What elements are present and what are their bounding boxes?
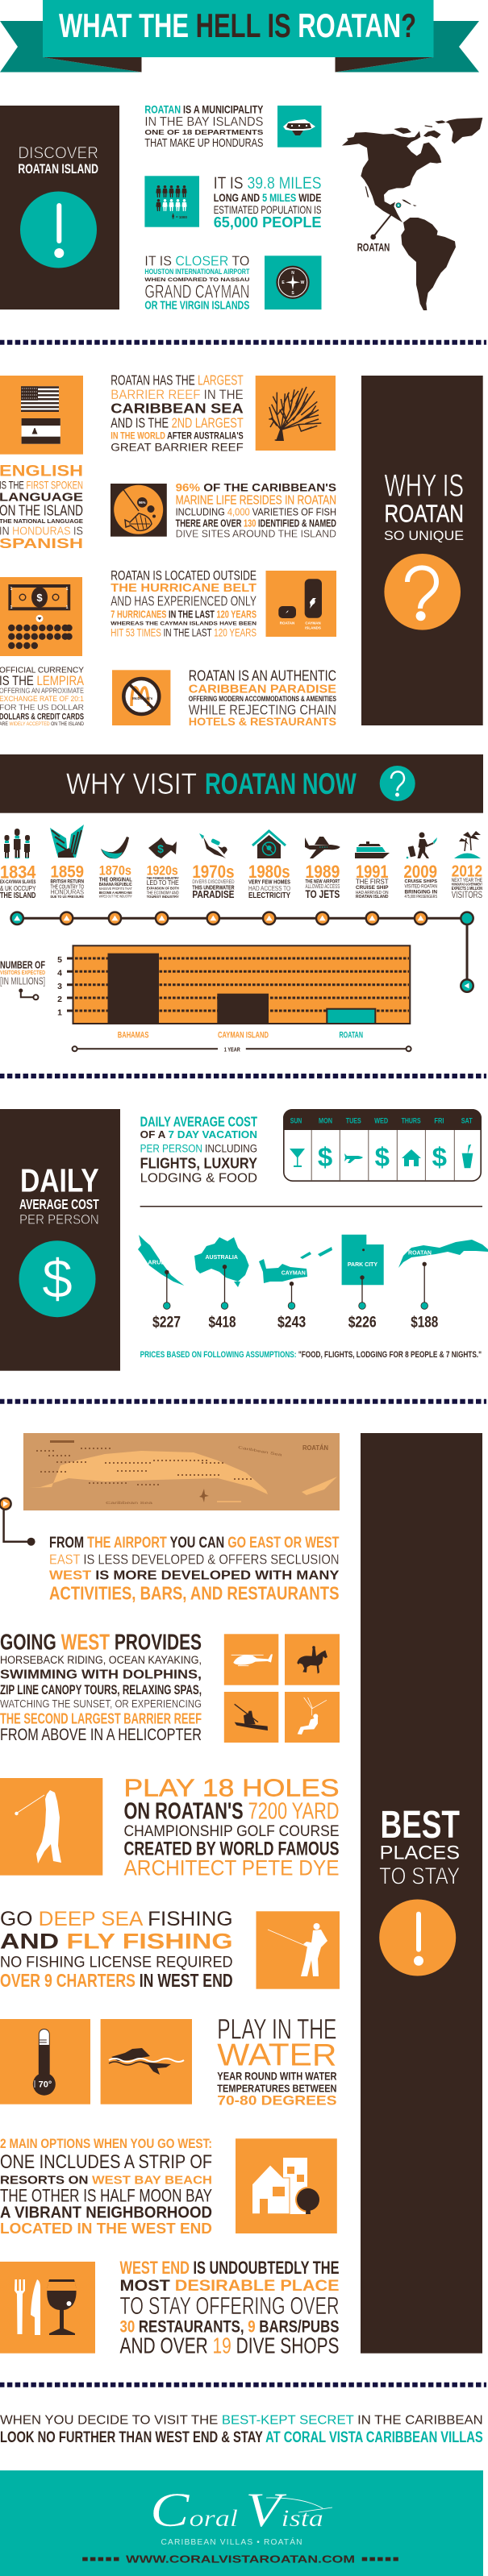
icon: compass: N [291, 271, 294, 276]
text block: english language: IS THE FIRST SPOKEN [0, 479, 83, 492]
timeline: 1920s: THE FISHING INDUSTRY [147, 876, 179, 880]
timeline: 1920s: 1920s [147, 863, 178, 879]
calendar: week of costs: WED [374, 1116, 388, 1125]
text block: marine life: INCLUDING 4,000 VARIETIES OF FISH [176, 506, 336, 517]
text block: marine life: THERE ARE OVER 130 IDENTIFIED & NAMED [176, 517, 336, 530]
timeline: 1980s: 1980s [248, 862, 290, 882]
timeline: 2009 [403, 862, 437, 900]
axis labels: 2 [57, 995, 62, 1004]
text block: fishing: GO DEEP SEA FISHING [0, 1908, 233, 1930]
text block: barrier reef: BARRIER REEF IN THE [111, 387, 244, 402]
section header: why visit roatan now [0, 754, 483, 813]
text block: going west: WATCHING THE SUNSET, OR EXPERIENCING [0, 1697, 202, 1710]
text block: west end: TO STAY OFFERING OVER [119, 2292, 339, 2320]
chart label: number of visitors: [IN MILLIONS] [0, 976, 45, 987]
panel: daily average cost: PER PERSON [19, 1211, 99, 1227]
icon: flags [0, 376, 83, 455]
icon: helicopter [224, 1634, 278, 1685]
timeline: 1920s: TOURIST INDUSTRY [147, 895, 179, 900]
text block: authentic paradise: ROATAN IS AN AUTHENTIC [189, 667, 336, 683]
timeline: 1980s: HAD ACCESS TO [248, 884, 290, 892]
chart label: number of visitors: VISITORS EXPECTED [0, 969, 45, 976]
timeline: 2012: 2012 [452, 862, 482, 880]
timeline: 1991: 1991 [356, 862, 389, 882]
icon: eagle [50, 825, 84, 858]
map: price comparison destinations: ROATAN [408, 1251, 432, 1256]
bar chart: visitors expected [57, 945, 410, 1040]
text block: play in the water: PLAY IN THE [217, 2013, 337, 2045]
timeline: 1859 [50, 862, 85, 900]
text block: english language: LANGUAGE [0, 491, 83, 505]
icon: thermometer: 70° [39, 2079, 52, 2089]
panel: discover roatan island [0, 106, 119, 310]
bar: cayman island [217, 994, 269, 1024]
text block: marine life [176, 481, 336, 539]
axis labels: CAYMAN ISLAND [218, 1030, 269, 1040]
bar icon: hurricanes comparison [266, 571, 336, 637]
text block: fishing: AND FLY FISHING [0, 1930, 233, 1954]
text block: size and population: ESTIMATED POPULATION IS [214, 203, 321, 216]
timeline: 1859: DUE TO US PRESSURE [50, 895, 85, 900]
text block: 7 day vacation: PER PERSON INCLUDING [140, 1142, 257, 1154]
text block: two main options: 2 MAIN OPTIONS WHEN YOU GO WEST: [0, 2136, 212, 2151]
icon: diver [199, 833, 227, 858]
footer: coral vista logo: C oral V ista [150, 2483, 323, 2537]
text block: hurricane belt: WHEREAS THE CAYMAN ISLANDS HAVE BEEN [111, 621, 257, 627]
icon: plane [344, 1153, 363, 1163]
timeline: 1834: 1834 [0, 862, 36, 882]
timeline: 1980s: ELECTRICITY [248, 891, 290, 900]
map: price comparison destinations: CAYMAN [282, 1270, 306, 1277]
axis labels: 5 [57, 955, 62, 965]
timeline: 1859: HONDURAS [50, 888, 84, 895]
footer: coral vista logo [0, 2470, 483, 2576]
icon: houses and tree [236, 2138, 337, 2233]
text block: golf: CREATED BY WORLD FAMOUS [124, 1839, 339, 1860]
timeline: 1980s [248, 862, 290, 900]
text block: english language: IN HONDURAS IS [0, 526, 83, 538]
chart label: number of visitors [0, 959, 45, 999]
section header: why visit roatan now: ROATAN NOW [205, 767, 357, 800]
title banner [0, 0, 479, 73]
timeline: 2009: VISITED ROATAN [405, 883, 437, 889]
map: roatan island: Caribbean Sea [106, 1501, 153, 1505]
text block: size and population: 65,000 PEOPLE [214, 214, 321, 231]
text block: going west: SWIMMING WITH DOLPHINS, [0, 1668, 202, 1682]
axis labels: 3 [57, 982, 62, 991]
text block: barrier reef: AND IS THE 2ND LARGEST [111, 415, 244, 431]
icon: traveler [407, 832, 437, 858]
island: australia [194, 1237, 249, 1287]
icon: money fish [148, 837, 177, 858]
connector arrow to airport text [0, 1498, 35, 1546]
text block: from the airport: FROM THE AIRPORT YOU CAN GO EAST OR WEST [49, 1535, 340, 1552]
icon: compass [265, 256, 321, 310]
timeline: 1980s: VERY FEW HOMES [248, 879, 290, 886]
timeline: 1870s [99, 863, 132, 898]
text block: 7 day vacation: DAILY AVERAGE COST [140, 1113, 257, 1129]
text block: going west [0, 1630, 202, 1744]
island: roatan [398, 1240, 488, 1268]
icon: currency exchange: 1 [10, 605, 13, 610]
icon: marine life [111, 484, 167, 537]
calendar: week of costs: $ [432, 1142, 447, 1172]
text block: authentic paradise: OFFERING MODERN ACCOMMODATIONS & AMENITIES [189, 695, 336, 703]
prices: $243 [277, 1314, 306, 1332]
text block: barrier reef [111, 372, 244, 453]
panel: best places to stay [361, 1433, 482, 2354]
text block: golf: ARCHITECT PETE DYE [124, 1856, 339, 1880]
text block: closer to houston: HOUSTON INTERNATIONAL AIRPORT [144, 268, 250, 276]
text block: from the airport: ACTIVITIES, BARS, AND RESTAURANTS [49, 1582, 339, 1603]
text block: going west: GOING WEST PROVIDES [0, 1630, 202, 1655]
text block: size and population: LONG AND 5 MILES WIDE [214, 192, 322, 204]
text block: authentic paradise: HOTELS & RESTAURANTS [189, 716, 336, 728]
text block: two main options [0, 2136, 212, 2237]
prices: $418 [208, 1314, 236, 1332]
icon: horse rider [285, 1634, 340, 1685]
map: price comparison destinations [138, 1235, 488, 1309]
timeline: 2012 [452, 862, 482, 900]
timeline: 2009: CRUISE SHIPS [405, 879, 437, 884]
icon: cocktail [290, 1149, 305, 1167]
text block: west end [119, 2258, 339, 2358]
icon: zipline [285, 1692, 340, 1743]
panel: daily average cost: DAILY [20, 1161, 99, 1199]
timeline: 1870s: 1870s [99, 863, 131, 879]
text block: municipality: ONE OF 18 DEPARTMENTS [144, 128, 264, 136]
text block: authentic paradise [189, 667, 336, 728]
icon: no chain restaurants [112, 670, 170, 725]
text block: english language: ENGLISH [0, 463, 83, 480]
text block: golf: CHAMPIONSHIP GOLF COURSE [124, 1823, 340, 1840]
text block: two main options: RESORTS ON WEST BAY BEACH [0, 2174, 212, 2187]
timeline: 1970s: DIVERS DISCOVERED [192, 879, 235, 885]
timeline: 2009: BRINGING IN [405, 890, 437, 895]
timeline: 1859: THE COUNTRY TO [50, 883, 84, 890]
timeline: 1989: TO JETS [305, 887, 340, 900]
calendar: week of costs [283, 1109, 482, 1181]
text block: going west: FROM ABOVE IN A HELICOPTER [0, 1725, 202, 1744]
bar: roatan [327, 1009, 375, 1024]
icon: compass: E [282, 280, 285, 285]
text block: currency: OFFERING AN APPROXIMATE [0, 687, 84, 695]
icon: honduras map [277, 106, 321, 147]
icon: house with bulb [252, 831, 286, 858]
text block: barrier reef: ROATAN HAS THE LARGEST [111, 372, 244, 388]
text block: west end: MOST DESIRABLE PLACE [119, 2277, 339, 2295]
footer: coral vista logo: WWW.CORALVISTAROATAN.COM [126, 2553, 355, 2565]
text block: play in the water [217, 2013, 337, 2109]
panel: why is roatan so unique: SO UNIQUE [384, 529, 464, 543]
text block: municipality: THAT MAKE UP HONDURAS [144, 137, 263, 150]
timeline: 1870s: BANANA REPUBLIC [99, 883, 132, 887]
panel: why is roatan so unique: ROATAN [384, 499, 464, 527]
bar icon: hurricanes comparison: CAYMAN [305, 621, 321, 625]
timeline: 1991: ROATAN ISLAND [356, 895, 389, 900]
island: cayman [259, 1247, 332, 1283]
text block: closer to houston: GRAND CAYMAN [144, 280, 249, 301]
axis labels: 4 [57, 969, 62, 978]
timeline: 1920s: EXPANSION OF BOTH [147, 886, 179, 891]
calendar: week of costs: $ [375, 1142, 390, 1172]
text block: from the airport: WEST IS MORE DEVELOPED WITH MANY [49, 1568, 340, 1582]
text block: marine life: DIVE SITES AROUND THE ISLAND [176, 528, 336, 539]
timeline: 1970s [192, 862, 235, 900]
state: utah park city [342, 1235, 384, 1285]
icon: banana [101, 837, 129, 858]
text block: golf: PLAY 18 HOLES [124, 1774, 339, 1801]
timeline: 1859: BRITISH RETURN [50, 879, 84, 884]
map: americas with roatan pin [342, 118, 482, 310]
timeline: 1991: THE FIRST [356, 879, 389, 886]
text block: authentic paradise: CARIBBEAN PARADISE [189, 683, 336, 696]
timeline: 1870s: THE ORIGINAL [99, 875, 132, 883]
text block: closer to houston: OR THE VIRGIN ISLANDS [144, 299, 250, 312]
calendar: week of costs: SAT [461, 1116, 473, 1125]
timeline: 1834: THE ISLAND [0, 891, 36, 900]
calendar: week of costs: MON [319, 1116, 332, 1125]
text block: municipality: IN THE BAY ISLANDS [144, 115, 263, 129]
timeline: 1834: & UK OCCUPY [0, 884, 36, 892]
bar icon: hurricanes comparison: ROATAN [280, 621, 294, 625]
timeline: 2009: 2009 [403, 862, 437, 882]
panel: discover roatan island: DISCOVER [18, 144, 98, 163]
island: aruba [138, 1235, 184, 1286]
text block: closer to houston: WHEN COMPARED TO NASSAU [144, 277, 250, 283]
text block: hurricane belt: THE HURRICANE BELT [111, 582, 257, 595]
icon: house [402, 1149, 421, 1166]
text block: currency: FOR THE US DOLLAR [0, 704, 84, 713]
icon: swimmer [101, 2019, 192, 2104]
icon: compass: W [301, 280, 305, 285]
footer: coral vista logo: CARIBBEAN VILLAS • ROATÁN [161, 2537, 302, 2547]
text block: english language: ON THE ISLAND [0, 501, 83, 518]
icon: palm island [454, 831, 481, 858]
icon: airplane [305, 837, 340, 858]
icon: kayak [224, 1692, 278, 1743]
axis labels: ROATAN [339, 1030, 363, 1040]
text block: fishing [0, 1908, 233, 1991]
text block: play in the water: WATER [217, 2038, 337, 2073]
panel: best places to stay: PLACES [380, 1843, 460, 1864]
text block: play in the water: YEAR ROUND WITH WATER [217, 2070, 337, 2083]
text block: fishing: OVER 9 CHARTERS IN WEST END [0, 1970, 233, 1991]
timeline: 1920s: THE ECONOMY AND [147, 891, 179, 895]
calendar: week of costs: FRI [434, 1116, 444, 1125]
text block: golf [124, 1774, 340, 1880]
text block: currency: OFFICIAL CURRENCY [0, 667, 84, 675]
calendar: week of costs: TUES [346, 1116, 361, 1125]
text block: marine life: 96% OF THE CARIBBEAN'S [176, 481, 336, 493]
axis labels: 1 [57, 1008, 62, 1017]
text block: going west: HORSEBACK RIDING, OCEAN KAYAKING, [0, 1654, 202, 1666]
text block: closer to houston: IT IS CLOSER TO [144, 252, 249, 268]
timeline: 1870s: WIPED OUT THE INDUSTRY [99, 894, 132, 898]
map: roatan island: ROATÁN [302, 1444, 328, 1452]
closing statement [0, 2414, 483, 2446]
closing statement: WHEN YOU DECIDE TO VISIT THE BEST-KEPT SECRET IN THE CARIBBEAN [0, 2414, 483, 2428]
panel: daily average cost [0, 1109, 120, 1371]
timeline: 1970s: THIS UNDERWATER [192, 883, 235, 891]
timeline: 1989: ALLOWED ACCESS [305, 883, 340, 890]
icon: golfer [0, 1778, 102, 1876]
timeline line and nodes [11, 912, 473, 992]
text block: play in the water: 70-80 DEGREES [217, 2093, 337, 2109]
map: price comparison destinations: AUSTRALIA [205, 1255, 238, 1261]
panel: daily average cost: AVERAGE COST [19, 1196, 99, 1212]
icon: fisherman [257, 1911, 340, 1989]
text block: 7 day vacation: LODGING & FOOD [140, 1171, 257, 1185]
panel: best places to stay: TO STAY [379, 1863, 460, 1889]
text block: currency: EXCHANGE RATE OF 20:1 [0, 695, 84, 703]
text block: fishing: NO FISHING LICENSE REQUIRED [0, 1954, 233, 1971]
title text: WHAT THE HELL IS ROATAN? [59, 6, 416, 44]
text block: authentic paradise: WHILE REJECTING CHAIN [189, 702, 336, 718]
timeline: 1870s: BECOME A HURRICANE [99, 891, 132, 895]
axis labels [57, 955, 363, 1040]
map label: ROATAN [357, 241, 390, 253]
text block: currency [0, 667, 85, 727]
icon: coral [256, 376, 336, 451]
panel: daily average cost: $ [42, 1249, 73, 1310]
text block: size and population: IT IS 39.8 MILES [214, 172, 322, 193]
text block: golf: ON ROATAN'S 7200 YARD [124, 1799, 339, 1825]
timeline icons [4, 825, 481, 858]
map: price comparison destinations: PARK CITY [348, 1262, 377, 1268]
text block: currency: DOLLARS & CREDIT CARDS [0, 713, 84, 722]
icon: currency exchange: 1 [66, 587, 69, 592]
text block: hurricane belt: AND HAS EXPERIENCED ONLY [111, 593, 257, 609]
icon: fork knife wine glass [0, 2262, 95, 2354]
text block: from the airport: EAST IS LESS DEVELOPED & OFFERS SECLUSION [49, 1552, 339, 1568]
timeline: 2009: 475,000 PASSENGERS [405, 895, 437, 900]
prices: $227 [152, 1314, 181, 1332]
text block: going west: ZIP LINE CANOPY TOURS, RELAXING SPAS, [0, 1683, 202, 1697]
timeline: 1989 [305, 862, 340, 900]
text block: hurricane belt: ROATAN IS LOCATED OUTSIDE [111, 567, 257, 583]
panel: discover roatan island: ROATAN ISLAND [18, 161, 98, 177]
calendar: week of costs: $ [318, 1142, 332, 1172]
text block: going west: THE SECOND LARGEST BARRIER REEF [0, 1710, 202, 1726]
map: price comparison destinations: ARUBA [148, 1259, 170, 1265]
icon: soldiers [4, 829, 30, 858]
text block: play in the water: TEMPERATURES BETWEEN [217, 2083, 337, 2094]
text block: municipality [144, 103, 264, 150]
text block: closer to houston [144, 252, 250, 312]
section header: why visit roatan now: WHY VISIT [66, 767, 197, 800]
timeline: 1991 [356, 862, 389, 900]
text block: two main options: LOCATED IN THE WEST END [0, 2220, 212, 2237]
bar: bahamas [108, 954, 159, 1024]
icon: no chain restaurants: McDonald's [132, 696, 153, 700]
text block: two main options: A VIBRANT NEIGHBORHOOD [0, 2204, 212, 2222]
icon: population pictogram: = 1000 [176, 215, 187, 219]
axis labels: BAHAMAS [118, 1030, 148, 1040]
timeline: 1970s: PARADISE [192, 889, 234, 900]
icon: marine life: 96% [139, 501, 146, 505]
timeline: 1859: 1859 [50, 862, 84, 881]
text block: currency: IS THE LEMPIRA [0, 673, 85, 688]
timeline: 1834: EX-CAYMAN SLAVES [0, 879, 36, 885]
calendar: week of costs: THURS [402, 1116, 421, 1125]
icon: currency exchange: $ [36, 592, 43, 604]
icon: currency exchange: 1 [66, 605, 69, 610]
text block: west end: 30 RESTAURANTS, 9 BARS/PUBS [119, 2317, 339, 2336]
text block: west end: WEST END IS UNDOUBTEDLY THE [119, 2258, 339, 2278]
icon: money fish: $ [157, 842, 164, 855]
timeline: 1920s: LED TO THE [147, 879, 179, 887]
prices [152, 1314, 438, 1332]
text block: marine life: MARINE LIFE RESIDES IN ROATAN [176, 494, 336, 508]
timeline: 1989: 1989 [305, 862, 340, 882]
timeline: 1991: CRUISE SHIP [356, 885, 389, 891]
timeline: 1989: THE NEW AIRPORT [305, 879, 340, 884]
text block: hurricane belt: HIT 53 TIMES IN THE LAST 120 YEARS [111, 625, 257, 638]
text block: 7 day vacation: OF A 7 DAY VACATION [140, 1129, 257, 1141]
panel: why is roatan so unique [361, 376, 483, 725]
text block: municipality: ROATAN IS A MUNICIPALITY [144, 103, 263, 116]
calendar: week of costs: SUN [290, 1116, 302, 1125]
icon: currency exchange [0, 577, 82, 656]
icon: cruise ship [355, 841, 390, 858]
text block: two main options: ONE INCLUDES A STRIP OF [0, 2151, 212, 2173]
text block: barrier reef: CARIBBEAN SEA [111, 401, 244, 417]
icon: compass: S [291, 291, 294, 296]
chart label: number of visitors: NUMBER OF [0, 959, 45, 970]
bar icon: hurricanes comparison: ISLANDS [305, 625, 321, 630]
text block: two main options: THE OTHER IS HALF MOON BAY [0, 2186, 212, 2206]
text block: hurricane belt: 7 HURRICANES IN THE LAST 120 YEARS [111, 608, 257, 620]
map pins [167, 1264, 424, 1303]
text block: from the airport [49, 1535, 340, 1603]
text block: west end: AND OVER 19 DIVE SHOPS [119, 2333, 339, 2358]
text block: english language [0, 463, 83, 551]
timeline: 1834 [0, 862, 36, 900]
axis: 1 year [73, 1045, 411, 1053]
axis: 1 year: 1 YEAR [224, 1045, 240, 1053]
prices: $226 [348, 1314, 377, 1332]
timeline: 1920s [147, 863, 179, 900]
text block: size and population [214, 172, 322, 231]
prices: $188 [411, 1314, 438, 1332]
text block: 7 day vacation [140, 1113, 257, 1185]
icon: population pictogram [144, 176, 199, 227]
text block: barrier reef: IN THE WORLD AFTER AUSTRALIA'S [111, 430, 244, 441]
timeline: 1870s: MASSIVE PROFITS THAT [99, 887, 132, 891]
timeline: 1970s: 1970s [192, 862, 234, 882]
panel: best places to stay: BEST [381, 1803, 460, 1847]
text block: hurricane belt [111, 567, 257, 638]
text block: english language: SPANISH [0, 535, 83, 551]
timeline: 1991: HAD ARRIVED ON [356, 891, 389, 895]
text block: barrier reef: GREAT BARRIER REEF [111, 440, 244, 453]
icon: currency exchange: 1 [10, 587, 13, 592]
map: roatan island: Caribbean Sea [238, 1445, 283, 1457]
text block: 7 day vacation: FLIGHTS, LUXURY [140, 1154, 257, 1171]
map: roatan island [23, 1433, 340, 1510]
text block: currency: ARE WIDELY ACCEPTED ON THE ISLAND [0, 721, 84, 727]
icon: thermometer [0, 2019, 90, 2104]
text block: english language: THE NATIONAL LANGUAGE [0, 517, 83, 525]
icon: drink cup [462, 1145, 473, 1168]
